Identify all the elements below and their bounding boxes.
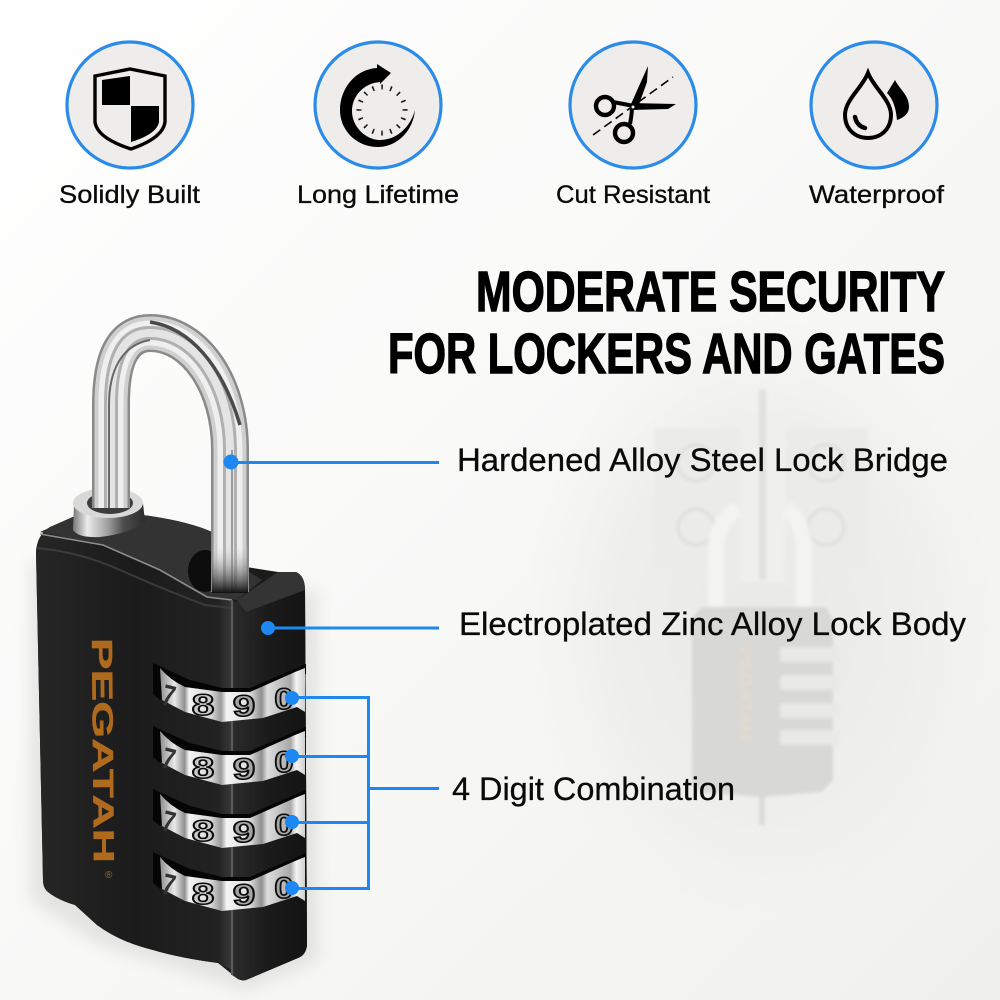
blurred background lock photo xyxy=(522,310,1000,930)
dial 2: 0 xyxy=(274,745,294,778)
dial 3: 8 xyxy=(192,814,214,848)
dial 4: 9 xyxy=(233,878,255,912)
dial 1: 0 xyxy=(274,682,294,715)
label: long lifetime: Long Lifetime xyxy=(297,181,459,209)
icon: scissors xyxy=(570,42,696,168)
label: waterproof: Waterproof xyxy=(809,181,944,209)
blurred background lock photo: PEGATAH xyxy=(736,646,755,740)
dial 2: 7 xyxy=(158,741,179,777)
label: cut resistant: Cut Resistant xyxy=(556,181,710,209)
dial 1 xyxy=(153,663,306,723)
shackle hole xyxy=(188,550,222,592)
icon: clock arrow xyxy=(315,42,441,168)
dial 4: 0 xyxy=(274,871,294,904)
dial 3: 9 xyxy=(233,815,255,849)
dial 3 xyxy=(153,789,306,849)
brand name: PEGATAH xyxy=(85,638,119,863)
feature: long lifetime xyxy=(297,42,459,209)
top surface xyxy=(40,514,262,600)
callout: lock body xyxy=(261,606,966,642)
callout: lock bridge: Hardened Alloy Steel Lock Bridge xyxy=(457,442,948,478)
dial 4 xyxy=(153,852,306,912)
callout: lock body: Electroplated Zinc Alloy Lock Body xyxy=(459,606,966,642)
lock body xyxy=(36,514,307,980)
heading xyxy=(388,260,945,386)
padlock photo xyxy=(30,322,318,990)
collar xyxy=(73,488,145,537)
dial 2: 8 xyxy=(192,751,214,785)
shackle xyxy=(109,322,248,593)
dial 1: 9 xyxy=(233,689,255,723)
feature: cut resistant xyxy=(556,42,710,209)
feature: waterproof xyxy=(809,42,944,209)
dial 2 xyxy=(153,726,306,786)
callout: digit combination: 4 Digit Combination xyxy=(452,771,735,807)
dial 4: 7 xyxy=(158,867,179,903)
dial 1: 8 xyxy=(192,688,214,722)
label: solidly built: Solidly Built xyxy=(59,181,200,209)
dial 3: 0 xyxy=(274,808,294,841)
feature: solidly built xyxy=(59,42,200,209)
right bevel xyxy=(237,572,305,612)
icon: shield xyxy=(67,42,193,168)
dial 1: 7 xyxy=(158,678,179,714)
lock shadow xyxy=(30,560,318,990)
callout: digit combination xyxy=(285,691,735,895)
brand name: ® xyxy=(105,870,113,881)
icon: water drops xyxy=(811,42,937,168)
dial 2: 9 xyxy=(233,752,255,786)
callout: lock bridge xyxy=(224,442,948,478)
brand name xyxy=(85,638,119,881)
dial 4: 8 xyxy=(192,877,214,911)
dial 3: 7 xyxy=(158,804,179,840)
